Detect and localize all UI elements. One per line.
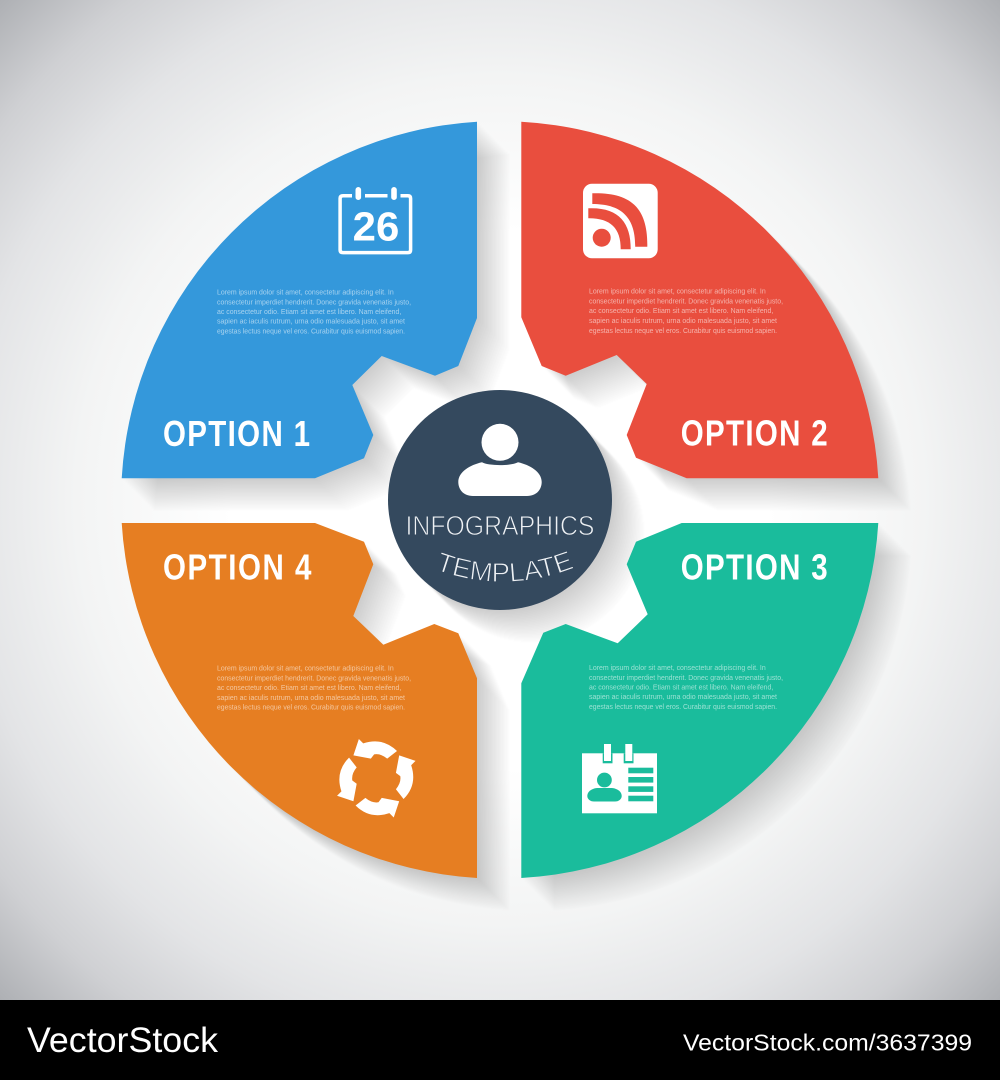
text block: option 2 description (589, 287, 783, 335)
long shadows of the panels (124, 124, 910, 910)
text block: option 3 description: consectetur imperdiet hendrerit. Donec gravida venenatis justo, (589, 673, 783, 682)
text block: option 2 description: sapien ac iaculis rutrum, urna odio malesuada justo, sit amet (589, 316, 778, 325)
icon: circular arrows (337, 739, 416, 818)
text block: option 4 description: sapien ac iaculis rutrum, urna odio malesuada justo, sit amet (217, 693, 406, 702)
watermark logo: VectorStock (27, 1021, 219, 1060)
icon: rss (583, 184, 658, 258)
text block: option 2 description: ac consectetur odio. Etiam sit amet est libero. Nam eleifend, (589, 306, 773, 315)
text block: option 3 description: Lorem ipsum dolor sit amet, consectetur adipiscing elit. In (589, 663, 766, 672)
center badge (388, 390, 612, 610)
icon: person (458, 424, 542, 496)
text block: option 4 description: Lorem ipsum dolor sit amet, consectetur adipiscing elit. In (217, 664, 394, 673)
text block: option 1 description: consectetur imperdiet hendrerit. Donec gravida venenatis justo, (217, 297, 411, 306)
panel: option 4 (122, 523, 477, 878)
title: template (curved): TEMPLATE (441, 552, 573, 582)
text block: option 3 description: sapien ac iaculis rutrum, urna odio malesuada justo, sit amet (589, 692, 778, 701)
text block: option 2 description: Lorem ipsum dolor sit amet, consectetur adipiscing elit. In (589, 287, 766, 296)
text block: option 1 description: ac consectetur odio. Etiam sit amet est libero. Nam eleifend, (217, 307, 401, 316)
icon: id badge (582, 744, 657, 813)
icon: calendar: 26 (353, 204, 399, 250)
text block: option 3 description: egestas lectus neque vel eros. Curabitur quis euismod sapien. (589, 702, 777, 711)
text block: option 1 description: sapien ac iaculis rutrum, urna odio malesuada justo, sit amet (217, 317, 406, 326)
text block: option 4 description: consectetur imperdiet hendrerit. Donec gravida venenatis justo, (217, 673, 411, 682)
text block: option 4 description: egestas lectus neque vel eros. Curabitur quis euismod sapien. (217, 703, 405, 712)
panel: option 2 (521, 122, 878, 478)
text block: option 1 description (217, 288, 411, 336)
text block: option 3 description (589, 663, 783, 711)
title: infographics: INFOGRAPHICS (406, 510, 594, 541)
text block: option 2 description: egestas lectus neque vel eros. Curabitur quis euismod sapien. (589, 326, 777, 335)
icon: calendar (340, 187, 411, 253)
text block: option 2 description: consectetur imperdiet hendrerit. Donec gravida venenatis justo, (589, 296, 783, 306)
text block: option 1 description: Lorem ipsum dolor sit amet, consectetur adipiscing elit. In (217, 288, 394, 296)
heading: option 2: OPTION 2 (681, 413, 828, 453)
text block: option 4 description: ac consectetur odio. Etiam sit amet est libero. Nam eleifend, (217, 683, 401, 692)
panel: option 3 (521, 523, 878, 878)
heading: option 1: OPTION 1 (163, 413, 310, 454)
text block: option 3 description: ac consectetur odio. Etiam sit amet est libero. Nam eleifend, (589, 682, 773, 692)
text block: option 1 description: egestas lectus neque vel eros. Curabitur quis euismod sapien. (217, 327, 405, 336)
heading: option 4: OPTION 4 (163, 547, 312, 587)
heading: option 3: OPTION 3 (681, 547, 828, 587)
text block: option 4 description (217, 664, 411, 712)
panel: option 1 (122, 122, 477, 478)
watermark url: VectorStock.com/3637399 (683, 1030, 972, 1056)
watermark bar (0, 1000, 1000, 1080)
